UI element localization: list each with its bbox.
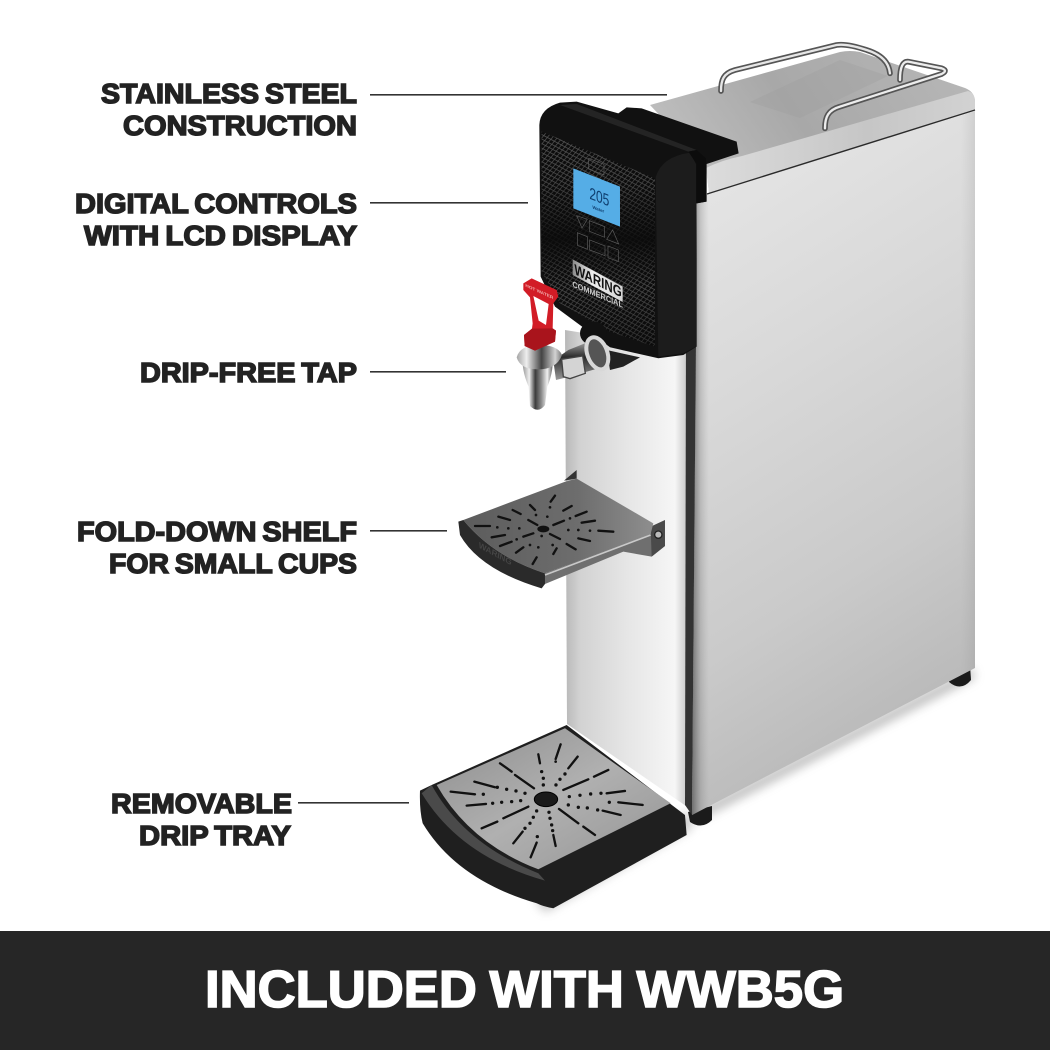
callout text (111, 788, 292, 851)
shelf light edge (545, 535, 651, 575)
chrome badge (573, 259, 623, 302)
faucet mount (580, 321, 607, 345)
rear clamp band (688, 150, 706, 203)
front handle (825, 62, 945, 128)
leader line (370, 202, 528, 204)
callout text (77, 516, 357, 579)
cast shadow under tray (535, 812, 692, 912)
carry handles (721, 45, 945, 128)
drip-free tap (517, 278, 640, 410)
fold-down shelf (458, 470, 665, 588)
top lid recess (750, 60, 888, 118)
tray drain slots (451, 744, 643, 857)
tap spout (523, 365, 553, 410)
textured control face (542, 132, 655, 347)
rear foot (949, 665, 971, 687)
callout text (75, 188, 357, 251)
callout text (101, 78, 357, 141)
shelf centre drain (537, 526, 549, 532)
tray plate (437, 728, 671, 869)
commercial text: COMMERCIAL (572, 279, 624, 310)
temperature reading: 205 (589, 183, 609, 210)
front handle highlight (825, 62, 945, 128)
callout text: CONSTRUCTION (123, 110, 357, 141)
brand name: WARING (574, 262, 622, 301)
water boiler product illustration (420, 45, 975, 912)
LCD display (573, 168, 620, 227)
rear handle (721, 45, 890, 91)
hinge screw (655, 531, 662, 538)
callout text: DRIP-FREE TAP (140, 357, 357, 388)
callout: digital controls (75, 188, 528, 251)
shelf drain dots (496, 506, 591, 549)
callout text: FOR SMALL CUPS (109, 548, 357, 579)
callout text: STAINLESS STEEL (101, 78, 357, 109)
shelf arm (545, 520, 665, 584)
LCD screen (573, 168, 620, 227)
WARING logo badge (572, 259, 624, 310)
rear shelf clip (564, 470, 577, 481)
callout text: WITH LCD DISPLAY (84, 220, 357, 251)
leader line (370, 371, 506, 373)
banner title: INCLUDED WITH WWB5G (205, 961, 844, 1019)
stainless side panel (692, 111, 975, 815)
leader line (370, 530, 447, 532)
removable drip tray (420, 725, 687, 908)
handle lower shade (524, 328, 556, 351)
cast shadow under unit (692, 668, 975, 822)
bottom banner (0, 931, 1050, 1050)
control housing (539, 102, 739, 358)
control buttons (577, 158, 619, 262)
tray centre drain (534, 792, 558, 807)
leader line (298, 802, 409, 804)
shelf lip (458, 520, 545, 588)
tap threaded collar (582, 334, 612, 372)
top seam line (707, 110, 975, 194)
tap hex nut (562, 356, 585, 379)
stainless top surface (650, 51, 975, 193)
top front bevel (706, 91, 975, 193)
banner background (0, 931, 1050, 1050)
callout: removable drip tray (111, 788, 409, 851)
digital control unit (539, 102, 739, 358)
shelf drain slots (475, 496, 613, 564)
tray drain dots (482, 760, 611, 838)
callout: stainless steel construction (101, 78, 667, 141)
callout text: DIGITAL CONTROLS (75, 188, 357, 219)
face shading (542, 132, 655, 347)
tap pipe (553, 338, 610, 380)
mode text: Water (592, 204, 604, 214)
housing top ridge (560, 104, 697, 152)
hot water label: HOT WATER (525, 283, 554, 301)
housing corner face (656, 153, 696, 357)
corner seam (685, 340, 696, 815)
shelf plate (463, 479, 653, 573)
front foot (688, 806, 712, 826)
tray rim highlight (422, 785, 545, 881)
side panel corner shading (692, 111, 975, 815)
callout text: REMOVABLE (111, 788, 292, 819)
rear handle highlight (721, 45, 890, 91)
red handle (523, 278, 558, 351)
shelf embossed brand: WARING (478, 540, 513, 567)
tap top cap (517, 345, 562, 369)
stainless front panel (565, 330, 690, 806)
tray base (420, 725, 687, 908)
tap rear shadow (607, 350, 640, 370)
leader line (370, 94, 667, 96)
callout: fold-down shelf (77, 516, 447, 579)
callout text: FOLD-DOWN SHELF (77, 516, 357, 547)
callout text: DRIP TRAY (139, 820, 291, 851)
shelf hinge bracket (651, 520, 665, 557)
